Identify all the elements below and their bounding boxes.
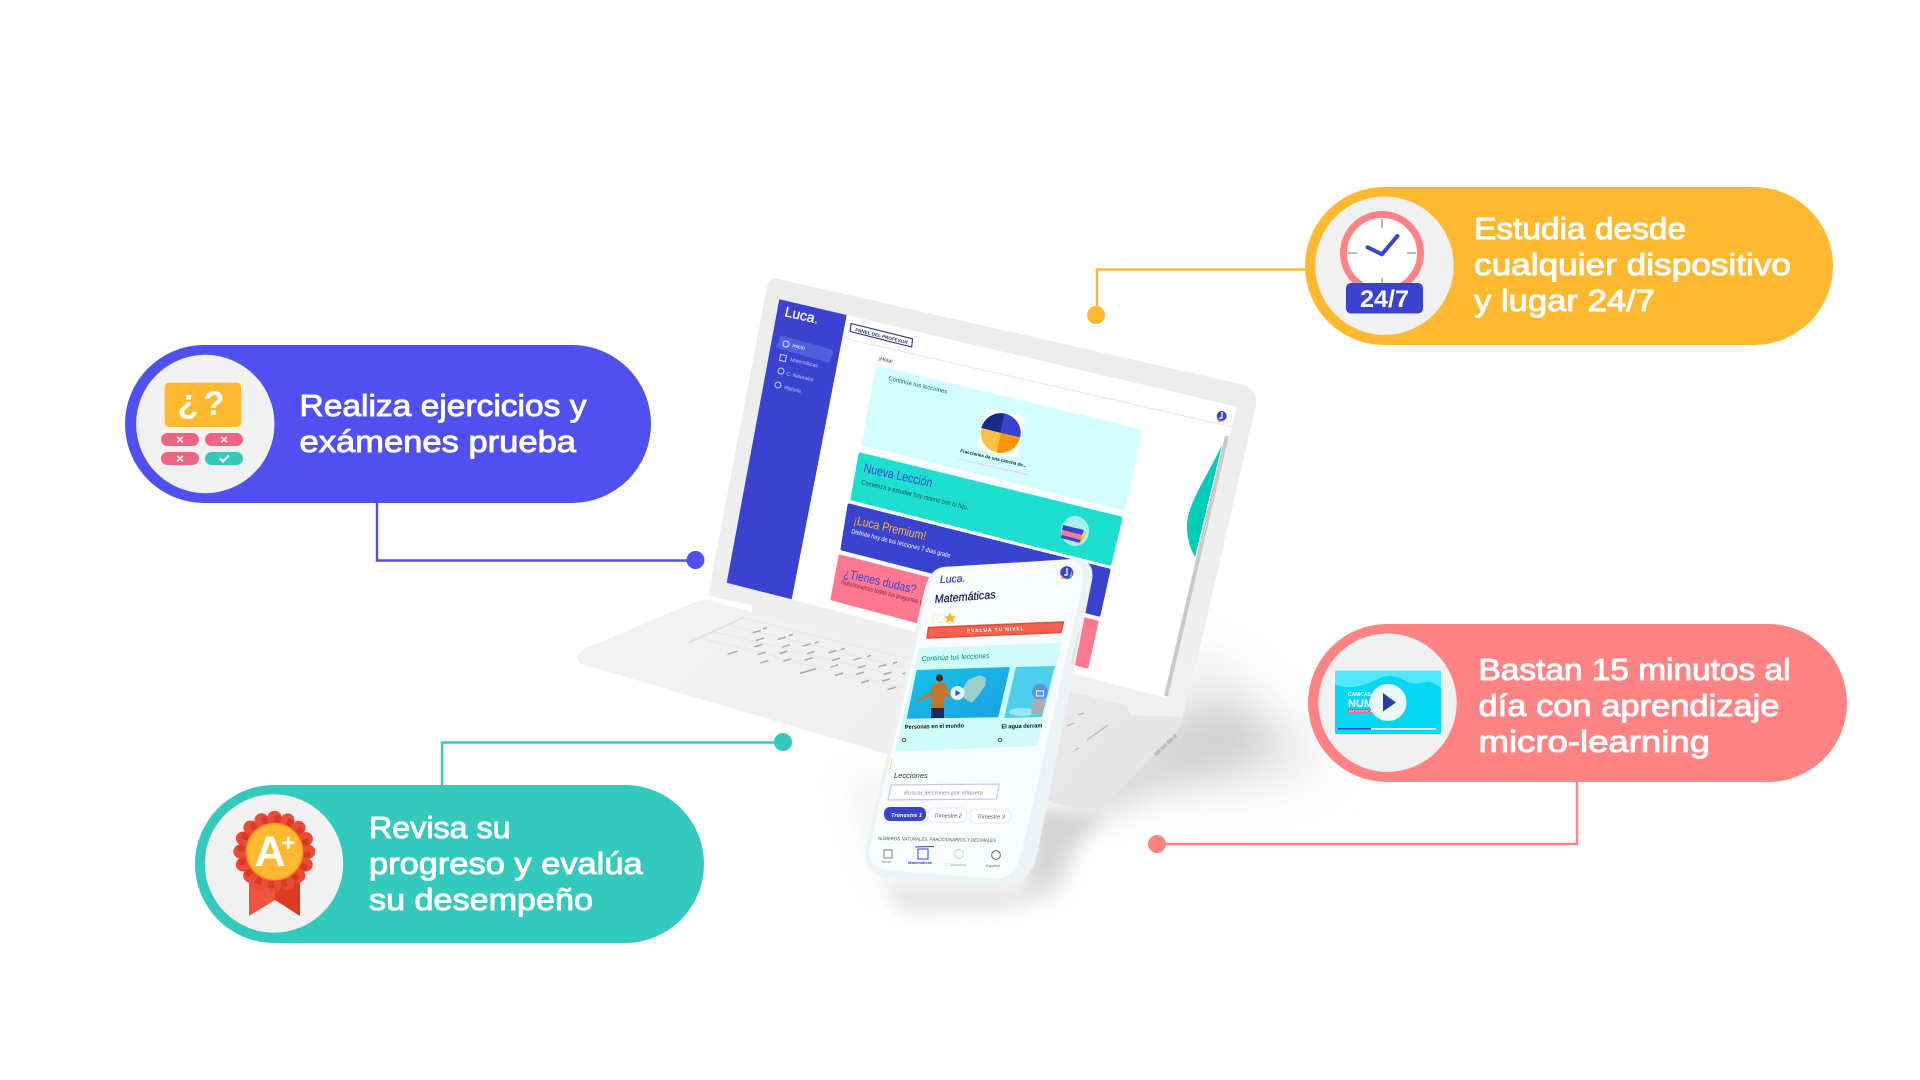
sidebar: Historia bbox=[784, 385, 802, 395]
teacher panel button: PANEL DEL PROFESOR bbox=[855, 327, 909, 345]
sidebar: C. Naturales bbox=[786, 371, 814, 383]
icon: clock 24/7 bbox=[1344, 214, 1423, 314]
text: any device bbox=[1474, 212, 1791, 318]
phone bottom navigation bbox=[882, 846, 1000, 868]
icon: clock 24/7: 24/7 bbox=[1360, 286, 1409, 313]
panel: exercises bbox=[125, 345, 651, 503]
yellow accent tick bbox=[890, 759, 892, 769]
text: progress: Revisa su bbox=[369, 811, 511, 845]
card: questions: Solucionamos todas tus preguntas y d bbox=[841, 579, 928, 607]
phone bbox=[865, 559, 1092, 886]
search box bbox=[888, 784, 999, 800]
pie chart bbox=[981, 413, 1021, 453]
icon: video player: MATEMATICAS bbox=[1349, 710, 1375, 714]
teacher panel button bbox=[850, 324, 912, 347]
lessons panel: Continúa tus lecciones bbox=[921, 651, 990, 663]
card: new lesson bbox=[852, 454, 1121, 564]
text: exercises: exámenes prueba bbox=[300, 425, 576, 459]
text: any device: y lugar 24/7 bbox=[1474, 284, 1655, 318]
subject heading: Matemáticas bbox=[934, 589, 996, 606]
laptop screen bbox=[727, 299, 1237, 698]
term tabs: Trimestre 1 bbox=[891, 813, 922, 819]
panel: micro-learning bbox=[1308, 624, 1847, 782]
lessons panel bbox=[895, 643, 1062, 752]
score: 92 bbox=[931, 611, 946, 626]
phone bottom navigation: C. Naturales bbox=[945, 863, 966, 867]
phone bottom navigation: Inicio bbox=[882, 860, 891, 864]
laptop base bbox=[577, 600, 1183, 810]
card: questions bbox=[832, 556, 1097, 667]
score bbox=[931, 611, 956, 626]
phone bottom navigation: Matemáticas bbox=[908, 860, 933, 865]
connector: purple bbox=[377, 503, 704, 569]
icon: quiz card: × bbox=[220, 432, 228, 447]
text: any device: Estudia desde bbox=[1474, 212, 1686, 246]
phone brand: Luca. bbox=[940, 573, 966, 586]
card: continue lessons bbox=[863, 367, 1141, 509]
lessons heading: Lecciones bbox=[894, 771, 928, 780]
phone avatar bbox=[1060, 566, 1073, 579]
connector: coral bbox=[1148, 781, 1577, 853]
text: progress bbox=[369, 811, 643, 917]
card: continue lessons: Continúa tus lecciones bbox=[888, 376, 948, 396]
sidebar: Luca. bbox=[783, 303, 820, 327]
panel: any device bbox=[1305, 187, 1833, 345]
text: progress: progreso y evalúa bbox=[369, 847, 643, 881]
icon: A+ rosette bbox=[238, 816, 310, 916]
card: new lesson: Comienza a estudiar hoy mismo con tu hijo. bbox=[861, 479, 969, 512]
icon: quiz card bbox=[161, 383, 243, 466]
term tabs: Trimestre 2 bbox=[934, 814, 963, 820]
video thumbnail 1 bbox=[907, 667, 1010, 719]
text: exercises: Realiza ejercicios y bbox=[300, 389, 587, 423]
phone body bbox=[865, 559, 1092, 886]
topic label: NÚMEROS NATURALES, FRACCIONARIOS Y DECIMALES bbox=[878, 835, 997, 844]
sidebar: Matemáticas bbox=[790, 357, 819, 369]
keyboard deck bbox=[688, 618, 930, 695]
scroll bar bbox=[1166, 436, 1227, 696]
term tabs: Trimestre 3 bbox=[977, 814, 1006, 820]
connector: yellow bbox=[1087, 270, 1305, 324]
evaluate button: EVALÚA TU NIVEL bbox=[967, 625, 1025, 634]
keyboard keys bbox=[728, 628, 911, 690]
icon: quiz card: × bbox=[176, 451, 184, 466]
card: questions: ¿Tienes dudas? bbox=[842, 566, 918, 597]
icon: quiz card: ? bbox=[204, 385, 224, 423]
evaluate button bbox=[927, 622, 1064, 638]
video thumbnail 2 bbox=[1004, 666, 1055, 718]
phone screen bbox=[869, 560, 1083, 879]
search box: Buscar lecciones por etiqueta bbox=[904, 790, 983, 796]
laptop lid bbox=[708, 279, 1256, 717]
right decorative blob bbox=[1187, 445, 1222, 557]
lessons panel: El agua derram bbox=[1001, 723, 1043, 730]
term tabs bbox=[884, 807, 1010, 823]
sidebar: Inicio bbox=[792, 343, 805, 352]
text: micro-learning: Bastan 15 minutos al bbox=[1478, 653, 1790, 687]
icon: video player bbox=[1335, 671, 1441, 734]
right keyboard and ports bbox=[1067, 713, 1108, 750]
greeting: ¡Hola! bbox=[878, 356, 894, 365]
text: micro-learning bbox=[1478, 653, 1790, 759]
panel: progress bbox=[195, 785, 704, 943]
text: progress: su desempeño bbox=[369, 883, 593, 917]
icon: quiz card: ¿ bbox=[178, 383, 198, 421]
icon: video player: CANICAS Y bbox=[1348, 692, 1376, 698]
text: micro-learning: micro-learning bbox=[1478, 725, 1710, 759]
lessons panel: Personas en el mundo bbox=[905, 723, 964, 731]
laptop bbox=[577, 279, 1256, 810]
laptop and phone shadow bbox=[840, 650, 1320, 912]
card: premium: ¡Luca Premium! bbox=[852, 513, 928, 543]
card: premium: Disfruta hoy de tus lecciones 7 días gratis bbox=[851, 528, 951, 560]
connector: teal bbox=[442, 733, 792, 785]
screen avatar bbox=[1217, 411, 1227, 422]
icon: video player: NUMEROS bbox=[1348, 698, 1404, 710]
card: premium bbox=[842, 505, 1109, 615]
books illustration bbox=[1061, 516, 1089, 546]
icon: A+ rosette: A bbox=[254, 828, 286, 876]
icon: quiz card: × bbox=[176, 432, 184, 447]
text: micro-learning: día con aprendizaje bbox=[1478, 689, 1780, 723]
phone side button bbox=[1072, 632, 1079, 664]
icon: A+ rosette: + bbox=[281, 830, 295, 857]
phone bottom navigation: Español bbox=[986, 864, 1000, 868]
card: continue lessons: Fracciones de una cancha de... bbox=[960, 448, 1027, 468]
header line bbox=[843, 338, 1237, 428]
text: any device: cualquier dispositivo bbox=[1474, 248, 1791, 282]
sidebar bbox=[727, 299, 847, 599]
text: exercises bbox=[300, 389, 587, 459]
card: new lesson: Nueva Lección bbox=[862, 460, 934, 490]
